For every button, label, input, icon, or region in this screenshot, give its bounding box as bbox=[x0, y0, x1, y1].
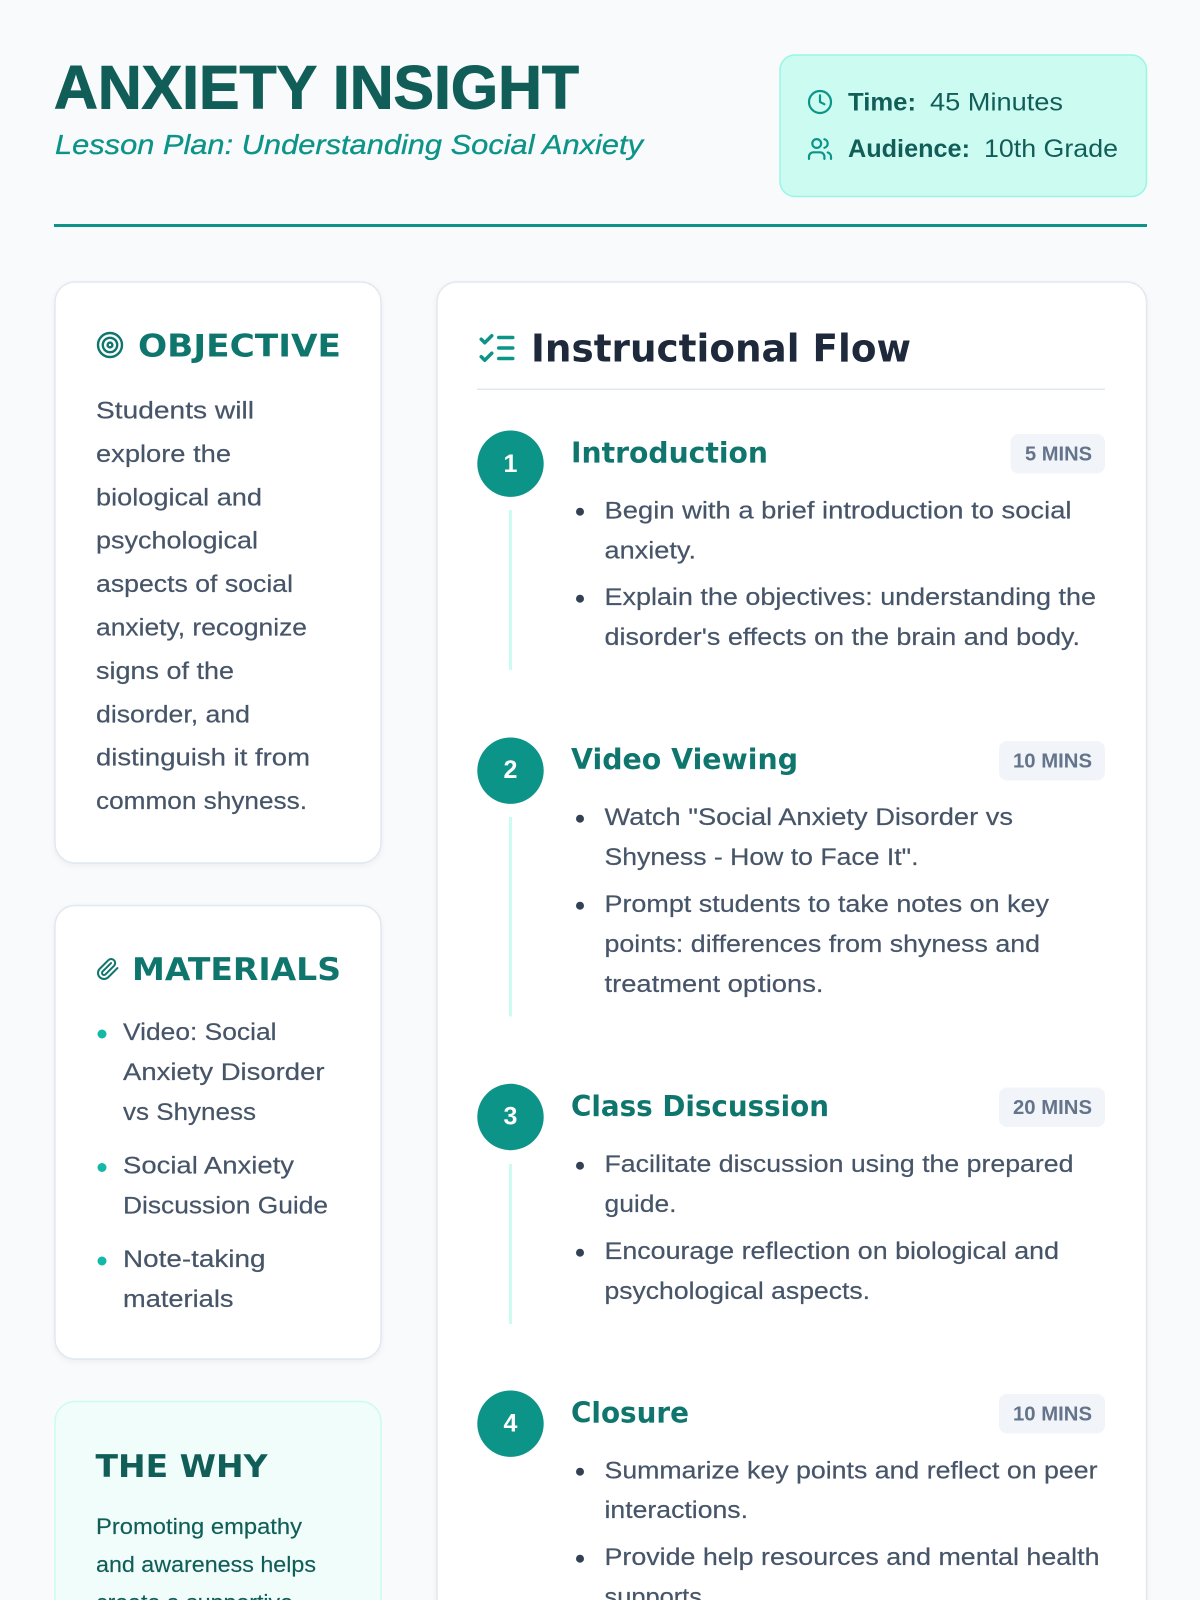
panel: materials bbox=[55, 906, 381, 1359]
step 2: video viewing bbox=[477, 738, 1105, 1016]
step bullets: Watch "Social Anxiety Disorder vs bbox=[604, 804, 1013, 831]
objective text: disorder, and bbox=[96, 701, 250, 728]
time value: 45 Minutes bbox=[930, 88, 1063, 116]
step bullets: anxiety. bbox=[604, 538, 696, 564]
subtitle: Lesson Plan: Understanding Social Anxiety bbox=[55, 129, 645, 160]
materials list: vs Shyness bbox=[123, 1099, 256, 1126]
materials heading: MATERIALS bbox=[132, 952, 341, 988]
objective heading: OBJECTIVE bbox=[138, 329, 341, 365]
why text: Promoting empathy bbox=[96, 1514, 303, 1539]
step bullets bbox=[576, 498, 1096, 651]
step bullets: interactions. bbox=[604, 1497, 748, 1524]
icon: users bbox=[809, 139, 831, 159]
objective text: biological and bbox=[96, 484, 262, 511]
step bullets: Encourage reflection on biological and bbox=[604, 1238, 1059, 1265]
objective text: common shyness. bbox=[96, 788, 307, 815]
step 3: class discussion bbox=[477, 1084, 1105, 1324]
objective text: signs of the bbox=[96, 658, 234, 685]
step bullets bbox=[576, 1151, 1074, 1305]
time label: Time: bbox=[848, 88, 916, 116]
step 4: closure bbox=[477, 1390, 1105, 1600]
step bullets: Provide help resources and mental health bbox=[604, 1544, 1100, 1571]
icon: target bbox=[98, 333, 122, 357]
why text: and awareness helps bbox=[96, 1552, 316, 1577]
step bullets: points: differences from shyness and bbox=[604, 931, 1040, 958]
duration badge: 20 MINS bbox=[1013, 1097, 1092, 1119]
materials list: materials bbox=[123, 1286, 234, 1313]
step heading: Class Discussion bbox=[571, 1090, 829, 1123]
step bullets: psychological aspects. bbox=[604, 1278, 870, 1305]
step bullets: Summarize key points and reflect on peer bbox=[604, 1458, 1098, 1484]
step heading: Introduction bbox=[571, 436, 768, 470]
step heading: Video Viewing bbox=[571, 743, 798, 776]
icon: paperclip bbox=[98, 959, 117, 979]
step number bbox=[477, 1390, 544, 1457]
objective text bbox=[96, 398, 310, 815]
duration badge: 5 MINS bbox=[1025, 444, 1092, 466]
meta box bbox=[780, 55, 1146, 196]
why text bbox=[96, 1514, 316, 1600]
step bullets: Prompt students to take notes on key bbox=[604, 891, 1049, 918]
step bullets: Shyness - How to Face It". bbox=[604, 844, 918, 871]
step bullets: treatment options. bbox=[604, 971, 824, 998]
step number bbox=[477, 738, 544, 804]
duration badge bbox=[999, 741, 1105, 780]
objective text: psychological bbox=[96, 528, 258, 555]
title: ANXIETY INSIGHT bbox=[54, 54, 579, 122]
materials list bbox=[98, 1019, 328, 1313]
panel: objective bbox=[55, 282, 381, 863]
materials list: Social Anxiety bbox=[123, 1152, 294, 1180]
step bullets bbox=[576, 1458, 1100, 1600]
header bbox=[54, 54, 1146, 196]
objective text: explore the bbox=[96, 441, 231, 468]
objective text: distinguish it from bbox=[96, 745, 310, 772]
step 1: introduction bbox=[477, 430, 1105, 670]
duration badge bbox=[1010, 434, 1105, 474]
icon: clock bbox=[809, 91, 831, 113]
step number: 2 bbox=[504, 756, 517, 784]
flow heading: Instructional Flow bbox=[531, 327, 911, 372]
materials list: Video: Social bbox=[123, 1019, 276, 1046]
materials list: Anxiety Disorder bbox=[123, 1059, 325, 1086]
panel: instructional flow bbox=[437, 282, 1146, 1600]
duration badge bbox=[999, 1088, 1105, 1127]
step bullets: disorder's effects on the brain and body. bbox=[604, 624, 1080, 651]
step bullets: Facilitate discussion using the prepared bbox=[604, 1151, 1074, 1178]
materials list: Note-taking bbox=[123, 1246, 266, 1273]
step number bbox=[477, 1084, 544, 1150]
objective text: anxiety, recognize bbox=[96, 614, 307, 642]
step number: 3 bbox=[504, 1102, 517, 1130]
audience label: Audience: bbox=[848, 135, 970, 163]
panel: the why bbox=[55, 1402, 381, 1600]
step number: 1 bbox=[504, 450, 518, 478]
step bullets: guide. bbox=[604, 1191, 676, 1218]
step heading: Closure bbox=[571, 1396, 689, 1430]
why heading: THE WHY bbox=[96, 1449, 269, 1485]
objective text: Students will bbox=[96, 398, 254, 424]
icon: checklist bbox=[481, 336, 513, 360]
materials list: Discussion Guide bbox=[123, 1192, 328, 1220]
step bullets bbox=[576, 804, 1049, 998]
step bullets: Begin with a brief introduction to social bbox=[604, 498, 1072, 524]
step bullets: Explain the objectives: understanding the bbox=[604, 584, 1096, 611]
step number: 4 bbox=[504, 1410, 518, 1438]
audience value: 10th Grade bbox=[984, 135, 1118, 163]
step number bbox=[477, 430, 544, 497]
duration badge bbox=[999, 1394, 1105, 1434]
duration badge: 10 MINS bbox=[1013, 1404, 1092, 1426]
objective text: aspects of social bbox=[96, 571, 293, 598]
duration badge: 10 MINS bbox=[1013, 751, 1092, 773]
